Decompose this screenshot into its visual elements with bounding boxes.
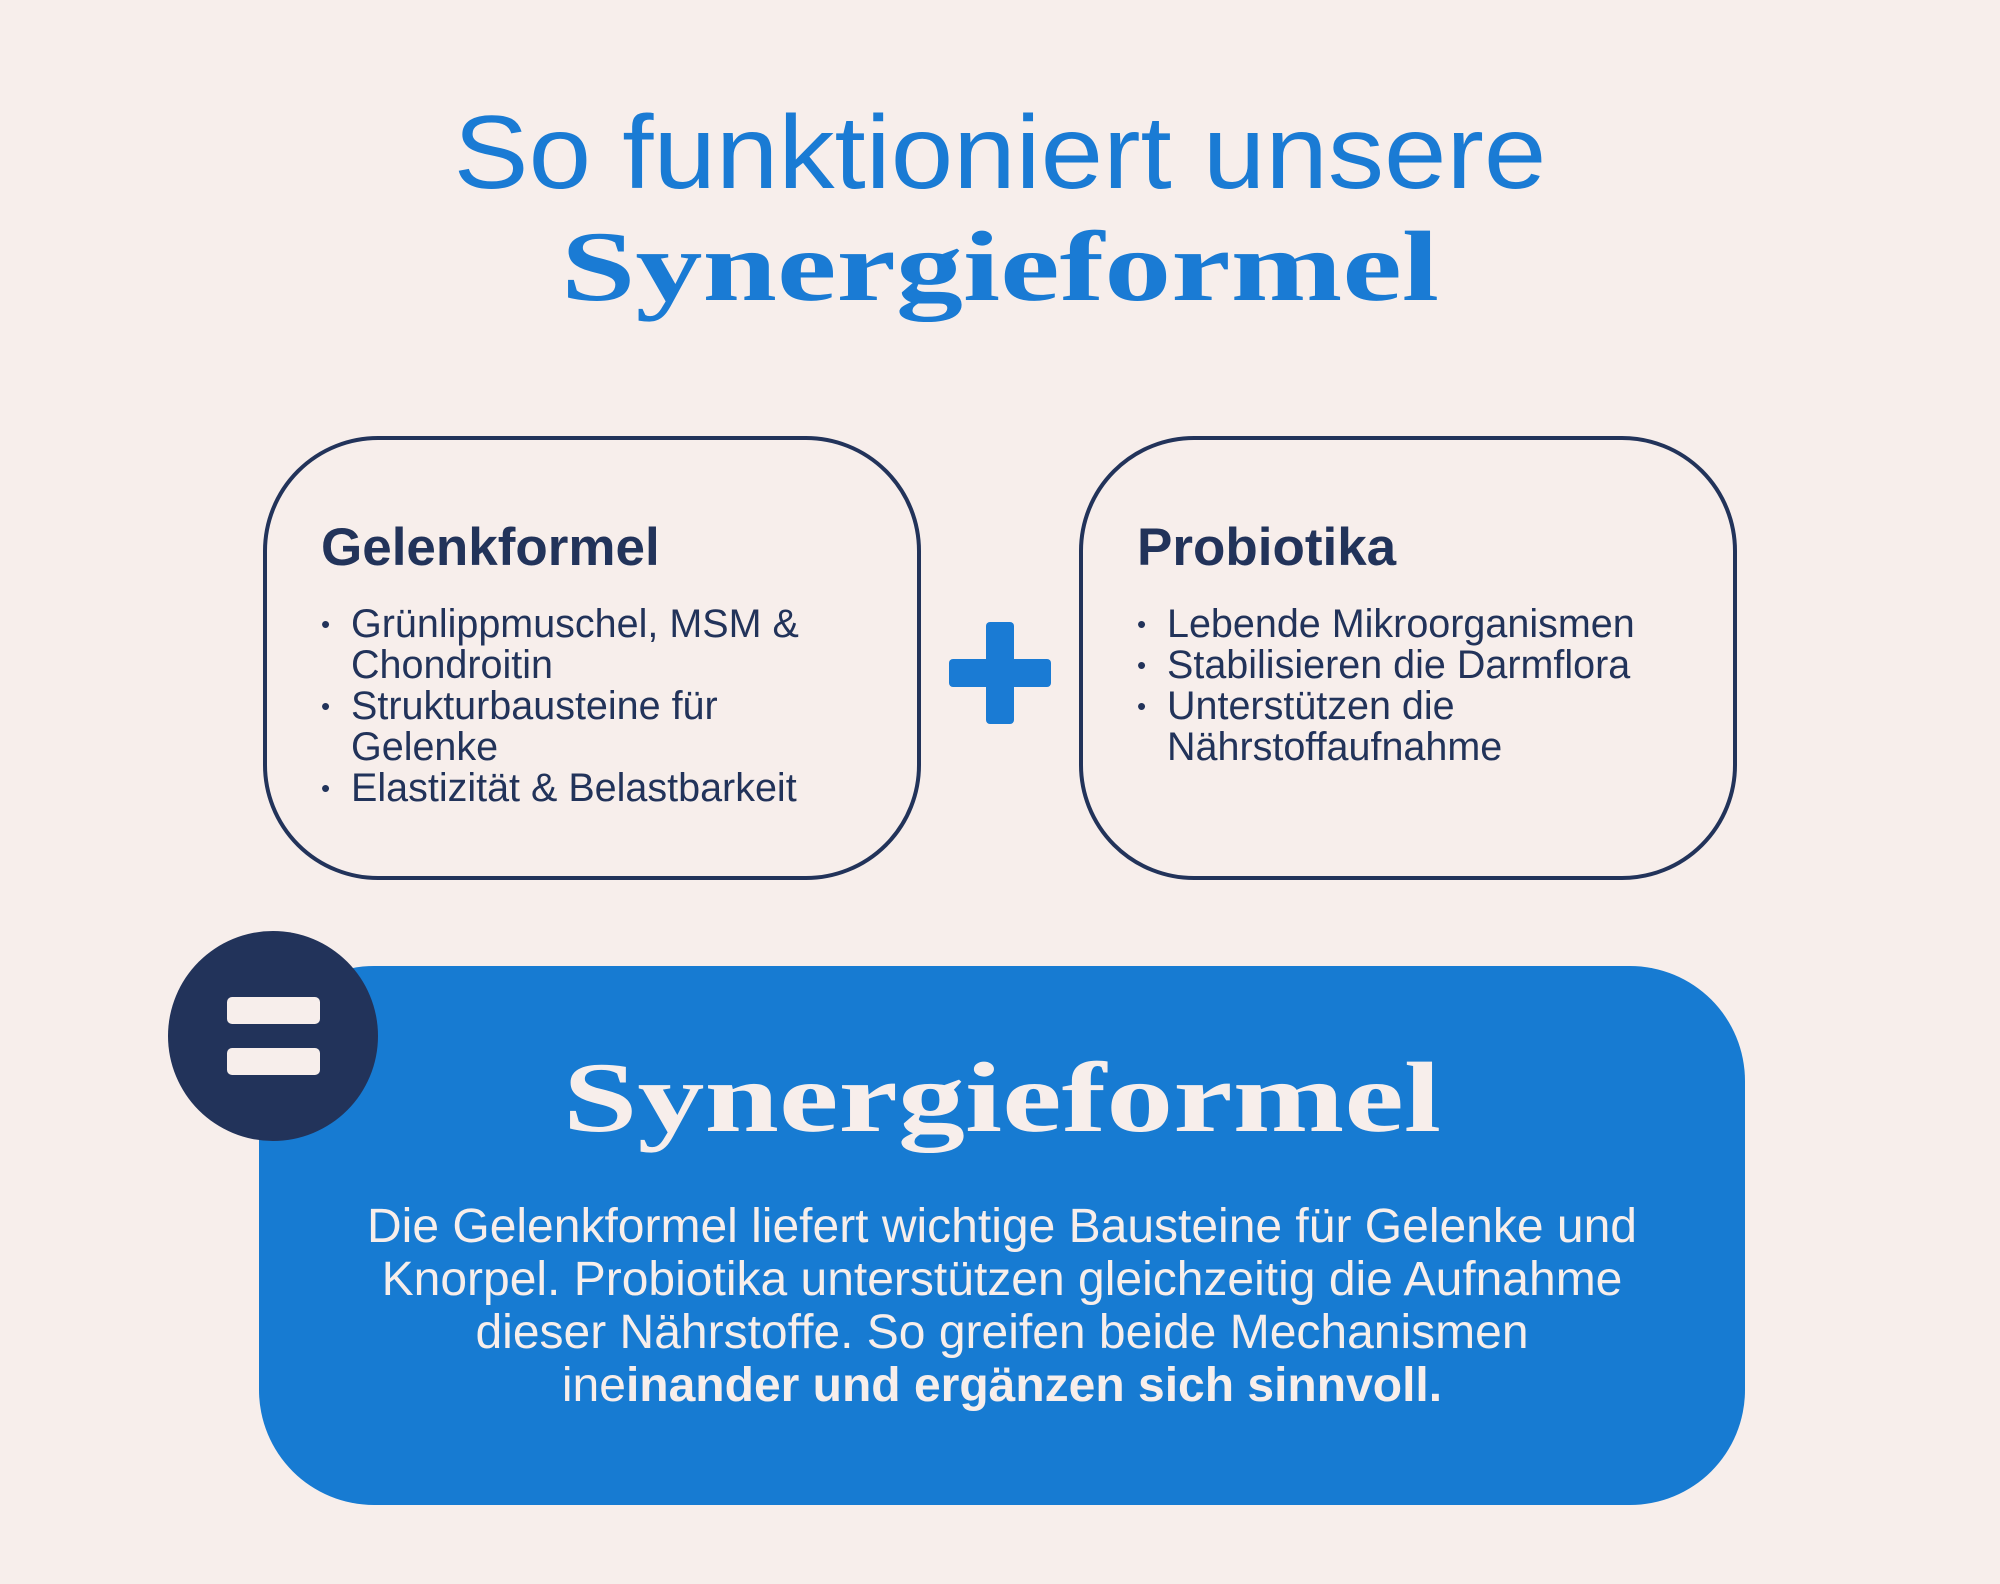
result text: ineinander und ergänzen sich sinnvoll. [562, 1359, 1442, 1412]
panel: Gelenkformel: Chondroitin [351, 643, 553, 687]
panel: Gelenkformel: Gelenke [351, 725, 498, 769]
panel: Gelenkformel: Strukturbausteine für [351, 684, 718, 728]
icon: equals circle [168, 931, 378, 1141]
panel: Gelenkformel: Gelenkformel [321, 518, 660, 577]
panel: result Synergieformel [259, 966, 1745, 1505]
title [454, 95, 1546, 322]
result heading: Synergieformel [563, 1042, 1441, 1153]
panel: Probiotika: Unterstützen die [1167, 684, 1455, 728]
panel: Probiotika: Lebende Mikroorganismen [1167, 602, 1635, 646]
panel: Gelenkformel: Grünlippmuschel, MSM & [351, 602, 799, 646]
result text [367, 1200, 1637, 1412]
result text: Die Gelenkformel liefert wichtige Bausteine für Gelenke und [367, 1200, 1637, 1253]
title: Synergieformel [561, 211, 1439, 322]
panel: Probiotika: Nährstoffaufnahme [1167, 725, 1502, 769]
result text: Knorpel. Probiotika unterstützen gleichzeitig die Aufnahme [382, 1253, 1622, 1306]
title: So funktioniert unsere [454, 95, 1546, 211]
panel: Probiotika: Stabilisieren die Darmflora [1167, 643, 1630, 687]
result text: dieser Nährstoffe. So greifen beide Mechanismen [475, 1306, 1529, 1359]
panel: Probiotika: Probiotika [1137, 518, 1396, 577]
panel: Gelenkformel [263, 436, 921, 880]
icon: plus [949, 622, 1051, 724]
panel: Gelenkformel: Elastizität & Belastbarkeit [351, 766, 797, 810]
panel: Probiotika [1079, 436, 1737, 880]
